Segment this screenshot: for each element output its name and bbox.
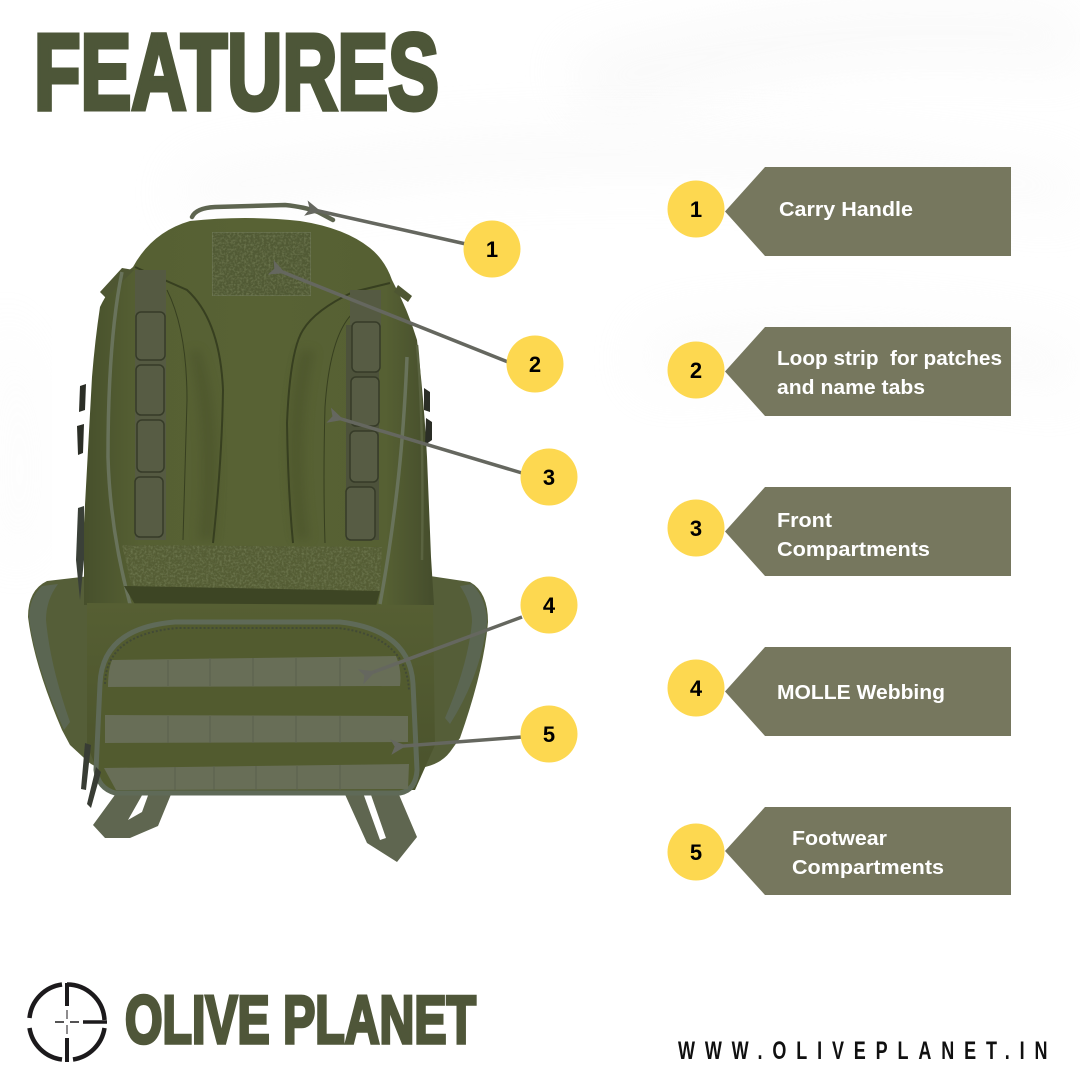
- feature tag 3: [668, 487, 1011, 576]
- feature tag 4: [668, 647, 1011, 736]
- title: FEATURES: [34, 11, 439, 132]
- logo crosshair icon: [30, 983, 107, 1062]
- feature tag 5: Compartments: [792, 857, 944, 879]
- side buckles: [77, 384, 432, 455]
- feature tag 4: MOLLE Webbing: [777, 682, 945, 704]
- website url: WWW.OLIVEPLANET.IN: [678, 1036, 1057, 1065]
- feature tag 1: [668, 167, 1011, 256]
- arrow 2: [276, 270, 508, 362]
- feature tag 2: 2: [690, 358, 702, 383]
- feature tag 5: Footwear: [792, 828, 887, 850]
- number badge 4 on backpack: 4: [543, 593, 556, 618]
- feature tag 5: [668, 807, 1011, 895]
- carry handle: [192, 205, 333, 220]
- zipper pulls: [81, 743, 101, 808]
- right side pocket: [420, 576, 488, 768]
- feature tag 2: and name tabs: [777, 377, 925, 399]
- number badge 1 on backpack: 1: [486, 237, 498, 262]
- feature tag 2: Loop strip for patches: [777, 348, 1002, 370]
- arrow 4: [367, 617, 522, 675]
- feature tag 3: Compartments: [777, 539, 930, 561]
- front panel seams: [135, 267, 390, 543]
- velcro bar: [122, 545, 382, 592]
- number badge 5 on backpack: 5: [543, 722, 555, 747]
- zip trim lines: [108, 272, 422, 604]
- left molle column: [135, 270, 166, 540]
- front pocket: [96, 622, 417, 793]
- number badge 5 on backpack: [520, 706, 578, 762]
- feature tag 3: 3: [690, 516, 702, 541]
- feature tag 5: 5: [690, 840, 702, 865]
- feature tag 3: Front: [777, 510, 832, 532]
- number badge 1 on backpack: [464, 220, 520, 278]
- number badge 3 on backpack: [520, 448, 578, 506]
- loop strip patch: [212, 232, 311, 296]
- right molle column: [346, 290, 381, 540]
- lower body: [87, 603, 435, 790]
- upper body: [84, 218, 434, 605]
- arrow 1: [312, 210, 466, 244]
- feature tag 1: Carry Handle: [779, 199, 913, 221]
- feature tag 1: 1: [690, 197, 702, 222]
- arrow 5: [397, 737, 522, 746]
- shoulder tabs: [100, 268, 412, 302]
- number badge 4 on backpack: [520, 576, 578, 634]
- feature tag 4: 4: [690, 676, 703, 701]
- molle webbing strips: [104, 656, 409, 790]
- left side pocket: [28, 576, 100, 768]
- brand name: OLIVE PLANET: [125, 982, 476, 1058]
- backpack illustration: [28, 205, 488, 862]
- number badge 2 on backpack: [506, 336, 564, 392]
- feature tag 2: [668, 327, 1011, 416]
- number badge 2 on backpack: 2: [529, 352, 541, 377]
- fabric shading: [190, 350, 315, 540]
- number badge 3 on backpack: 3: [543, 465, 555, 490]
- arrow 3: [335, 417, 522, 473]
- bottom straps: [93, 788, 417, 862]
